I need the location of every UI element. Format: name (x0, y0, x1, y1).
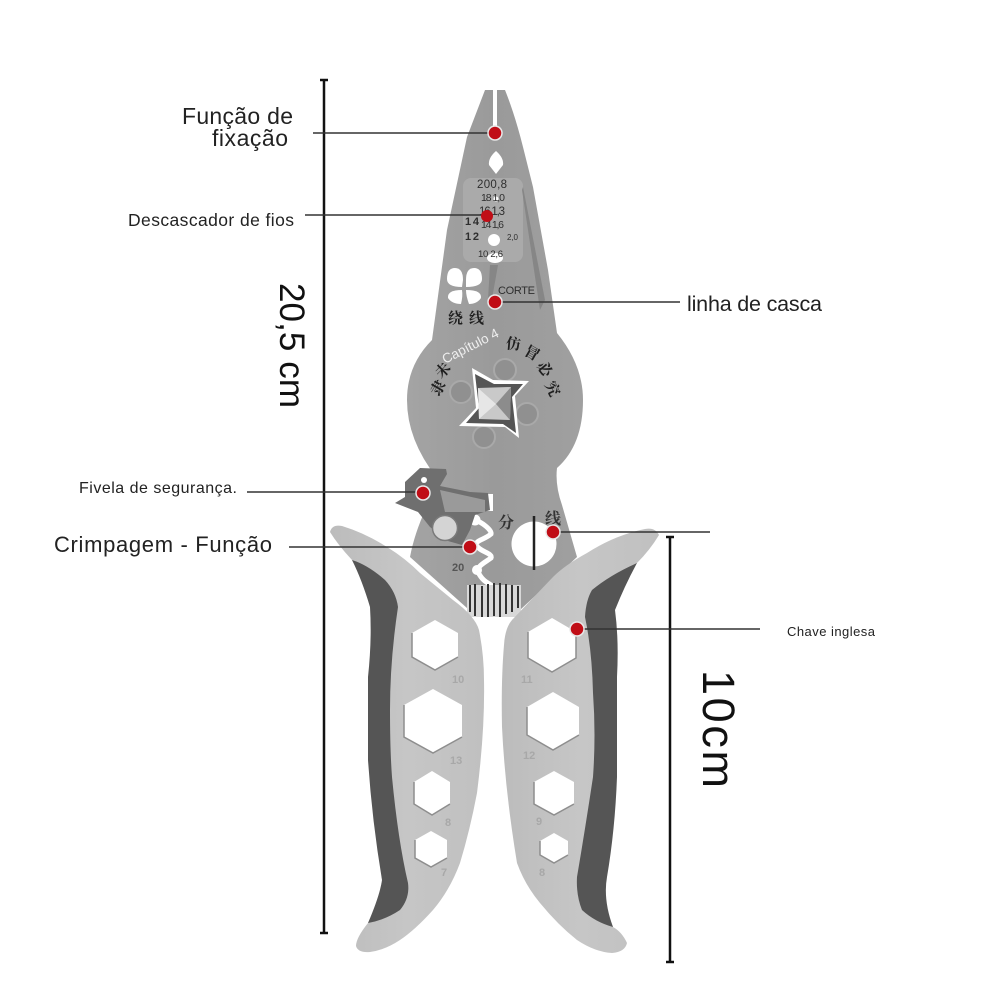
left grip (352, 560, 408, 923)
size labels left: 13 (450, 755, 462, 767)
safety buckle (395, 468, 490, 545)
stripper gauge text: 18 1,0 (481, 192, 505, 204)
hole index line (533, 516, 535, 570)
crimping slot (470, 494, 493, 585)
stripper gauge text (465, 179, 535, 297)
stripper gauge text: 200,8 (477, 179, 507, 191)
jaw slit (493, 90, 497, 130)
dimension line: total length (320, 80, 328, 933)
label: fivela de segurança: Fivela de segurança. (79, 480, 237, 497)
red markers (416, 126, 584, 636)
stripping hole (512, 522, 556, 566)
size labels right: 12 (523, 750, 535, 762)
central star pivot (459, 368, 529, 438)
chinese marks: 线 (545, 506, 561, 529)
chinese marks: 必 (532, 356, 559, 383)
size labels left (441, 674, 464, 879)
label: crimpagem: Crimpagem - Função (54, 532, 272, 557)
size labels left: 8 (445, 817, 451, 829)
clover cutouts (447, 268, 482, 304)
right handle (502, 529, 659, 953)
plier jaw and head (407, 90, 583, 617)
cutting edge groove (488, 187, 545, 310)
size labels right: 8 (539, 867, 545, 879)
chinese marks: 未 (430, 357, 455, 383)
chinese marks: 分 (498, 510, 514, 533)
chinese marks: 隶 (425, 376, 451, 400)
crimping marks: 20 (452, 562, 464, 574)
label: função de fixação (182, 103, 293, 151)
dimension line: handle length (666, 537, 674, 962)
leader lines (247, 133, 760, 629)
chinese marks (425, 307, 565, 533)
buckle ball (432, 516, 458, 540)
label: linha de casca: linha de casca (687, 292, 822, 316)
label: chave inglesa: Chave inglesa (787, 624, 876, 639)
stripper gauge text: 10 2,6 (478, 249, 503, 260)
size labels right (521, 674, 545, 879)
left hex edges (404, 633, 462, 867)
caption on head: Capítulo 4 (440, 325, 502, 367)
dimension label: 20,5 cm: 20,5 cm (272, 283, 311, 408)
label: função de fixação: Função de (182, 103, 293, 129)
stripper gauge text: 1 4 (465, 216, 480, 228)
chinese marks: 绕 (448, 307, 463, 328)
chinese marks: 仿 (505, 332, 522, 355)
left handle (330, 526, 484, 952)
spring (467, 583, 521, 617)
label: função de fixação: fixação (212, 125, 288, 151)
dimension label: 10cm: 10cm (693, 670, 744, 788)
size labels left: 10 (452, 674, 464, 686)
size labels right: 9 (536, 816, 542, 828)
chinese marks: 冒 (520, 340, 544, 366)
stripper gauge text: 16 1,3 (479, 206, 505, 218)
size labels left: 7 (441, 867, 447, 879)
stripper gauge text: CORTE (498, 285, 535, 297)
wire stripper plate (463, 178, 523, 262)
stripper gauge text: 14 1,6 (481, 219, 504, 231)
buckle hole (421, 477, 427, 483)
label: descascador de fios: Descascador de fios (128, 210, 294, 230)
chinese marks: 究 (540, 377, 565, 400)
size labels right: 11 (521, 674, 533, 686)
stripper gauge text: 1 2 (465, 231, 479, 243)
chinese marks: 线 (469, 307, 484, 328)
stripper gauge text: 2,0 (507, 233, 519, 242)
plier illustration (330, 90, 659, 953)
rivets (450, 359, 538, 448)
stripper holes (487, 196, 503, 263)
right hex edges (527, 632, 579, 863)
jaw hole (489, 151, 503, 174)
right grip (577, 563, 637, 927)
